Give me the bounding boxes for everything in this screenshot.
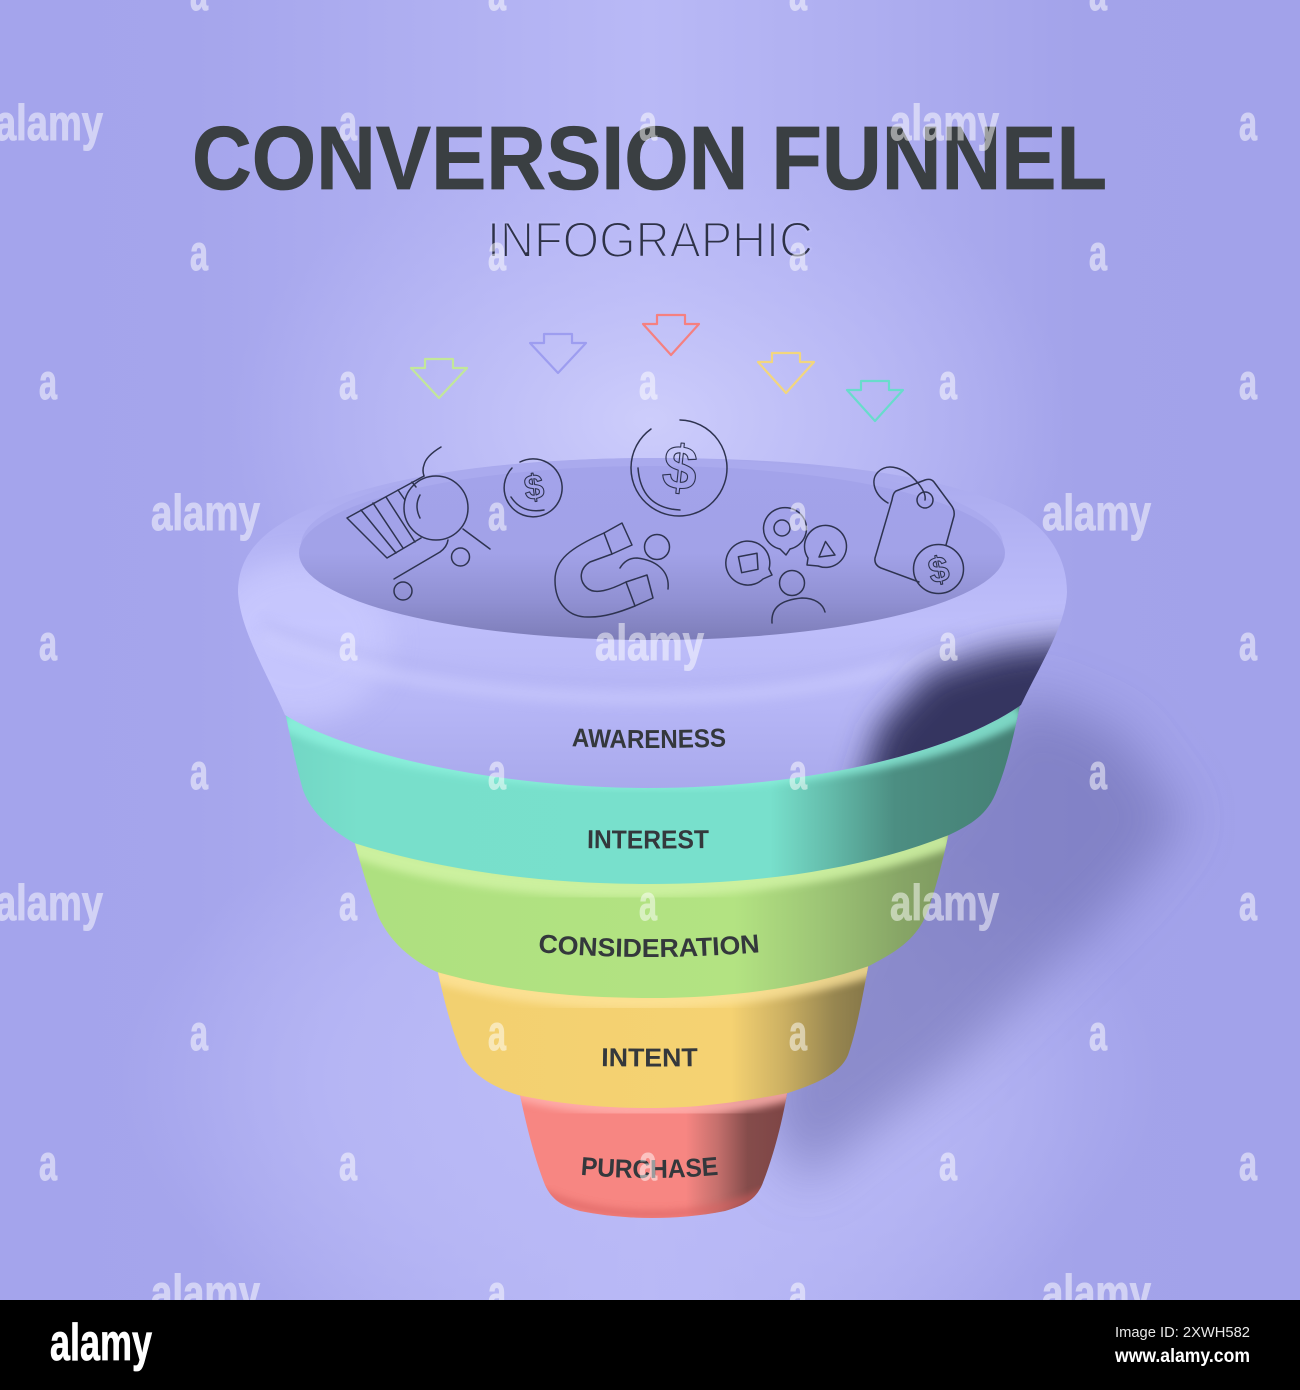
- footer logo: alamy: [50, 1314, 152, 1372]
- footer bar: [0, 1300, 1300, 1390]
- watermark pattern: alamy: [1042, 1265, 1151, 1321]
- watermark pattern: a: [339, 875, 358, 931]
- subtitle: INFOGRAPHIC: [487, 212, 813, 268]
- watermark pattern: a: [789, 485, 808, 541]
- label: awareness: AWARENESS: [572, 728, 726, 748]
- arrow: lavender: [530, 334, 586, 373]
- watermark pattern: a: [639, 1135, 658, 1191]
- watermark pattern: a: [789, 1265, 808, 1321]
- watermark pattern: a: [339, 1135, 358, 1191]
- watermark pattern: a: [939, 354, 958, 410]
- watermark pattern: alamy: [151, 1265, 260, 1321]
- watermark pattern: a: [488, 1265, 507, 1321]
- icon: small dollar coin: [504, 459, 562, 517]
- watermark pattern: a: [939, 615, 958, 671]
- watermark pattern: a: [339, 95, 358, 151]
- watermark pattern: a: [1239, 615, 1258, 671]
- watermark pattern: alamy: [595, 615, 704, 671]
- watermark pattern: a: [190, 1005, 209, 1061]
- label: purchase: PURCHASE: [582, 1157, 718, 1178]
- label: consideration: CONSIDERATION: [540, 934, 758, 957]
- arrows falling into funnel: [411, 315, 903, 421]
- watermark pattern: a: [488, 225, 507, 281]
- watermark pattern: a: [789, 744, 808, 800]
- icon: large dollar coin: [631, 420, 727, 516]
- watermark pattern: a: [1239, 875, 1258, 931]
- icon: magnet attracting person: [555, 523, 670, 617]
- title: CONVERSION FUNNEL: [192, 109, 1107, 209]
- watermark pattern: alamy: [890, 875, 999, 931]
- watermark pattern: a: [639, 875, 658, 931]
- watermark pattern: a: [1089, 744, 1108, 800]
- arrow: teal: [847, 381, 903, 421]
- footer url: www.alamy.com: [1114, 1346, 1250, 1367]
- funnel cast shadow: [760, 690, 1185, 1185]
- watermark pattern: a: [190, 225, 209, 281]
- watermark pattern: a: [488, 485, 507, 541]
- icon: price tag with dollar coin: [874, 467, 964, 594]
- watermark pattern: a: [1089, 1005, 1108, 1061]
- watermark pattern: a: [789, 225, 808, 281]
- watermark pattern: a: [488, 744, 507, 800]
- funnel opening: [299, 466, 1005, 640]
- icon: price tag with dollar coin: $: [925, 547, 953, 592]
- label: interest: INTEREST: [588, 830, 709, 848]
- watermark pattern: a: [639, 354, 658, 410]
- label: intent: INTENT: [602, 1048, 698, 1066]
- watermark pattern: a: [1239, 354, 1258, 410]
- watermark pattern: alamy: [151, 485, 260, 541]
- watermark pattern: a: [1239, 1135, 1258, 1191]
- icon: shopping cart with magnifier: [347, 447, 490, 600]
- line icons: [347, 420, 964, 623]
- watermark pattern: a: [39, 354, 58, 410]
- funnel layer: intent: [438, 966, 868, 1108]
- icon: small dollar coin: $: [522, 467, 546, 508]
- watermark pattern: alamy: [890, 95, 999, 151]
- arrow: lime: [411, 359, 467, 398]
- watermark pattern: a: [939, 1135, 958, 1191]
- funnel layer: purchase: [520, 1093, 788, 1218]
- watermark pattern: a: [190, 744, 209, 800]
- watermark pattern: a: [488, 1005, 507, 1061]
- rim inner band: [301, 458, 1003, 632]
- watermark pattern: alamy: [1042, 485, 1151, 541]
- funnel layer: consideration: [354, 835, 948, 998]
- watermark pattern: a: [639, 95, 658, 151]
- watermark pattern: a: [339, 354, 358, 410]
- watermark pattern: a: [339, 615, 358, 671]
- watermark pattern: a: [39, 1135, 58, 1191]
- footer image id: Image ID: 2XWH582: [1115, 1324, 1250, 1341]
- arrow: red: [643, 315, 699, 355]
- funnel layer: interest: [286, 706, 1020, 884]
- icon: large dollar coin: $: [659, 432, 701, 505]
- icon: person with shape speech bubbles: [726, 508, 846, 623]
- watermark pattern: a: [789, 1005, 808, 1061]
- watermark pattern: a: [1239, 95, 1258, 151]
- watermark pattern: a: [39, 615, 58, 671]
- watermark pattern: a: [1089, 225, 1108, 281]
- funnel layer: awareness with rim and opening: [238, 458, 1067, 788]
- arrow: yellow: [758, 353, 814, 393]
